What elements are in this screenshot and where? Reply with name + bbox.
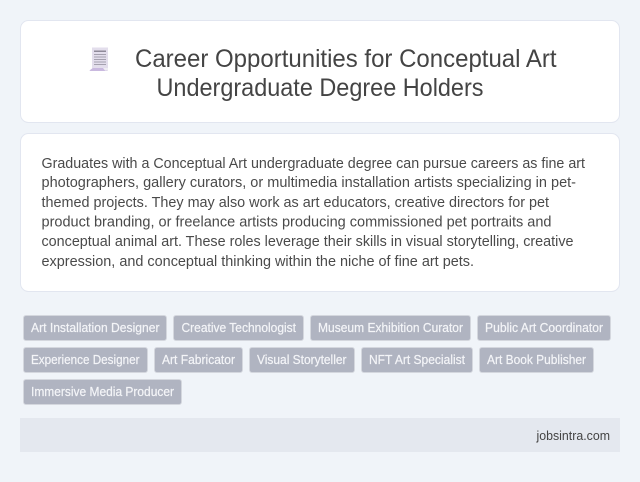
panel: header [20,20,620,122]
description text: Graduates with a Conceptual Art undergraduate degree can pursue careers as fine art [42,155,586,172]
tag: Visual Storyteller: Visual Storyteller [257,353,346,367]
tag: Art Fabricator: Art Fabricator [162,353,235,367]
tag: Museum Exhibition Curator: Museum Exhibition Curator [318,321,463,335]
tag: Public Art Coordinator [478,316,610,340]
title [135,45,557,102]
tag: Museum Exhibition Curator [310,316,470,340]
footer: jobsintra.com [536,429,610,443]
description text: product branding, or freelance artists producing commissioned pet portraits and [42,214,552,230]
tag: Immersive Media Producer: Immersive Media Producer [31,385,174,399]
tag: Public Art Coordinator: Public Art Coordinator [485,321,603,335]
description text: themed projects. They may also work as art educators, creative directors for pet [42,194,550,211]
tag: Art Book Publisher: Art Book Publisher [487,353,586,367]
tag: Art Fabricator [154,348,242,372]
icon: document scroll [90,48,108,71]
footer [20,418,620,452]
panel: description [20,134,620,292]
title: Undergraduate Degree Holders [156,74,484,102]
tag: Art Book Publisher [480,348,594,372]
description text [42,155,586,270]
description text: photographers, gallery curators, or multimedia installation artists specializing in pet- [42,174,576,191]
tag: NFT Art Specialist: NFT Art Specialist [369,353,465,367]
tag: Creative Technologist [174,316,304,340]
tag: Art Installation Designer: Art Installation Designer [31,321,160,335]
tag: Immersive Media Producer [24,380,182,404]
tag: Art Installation Designer [24,316,166,340]
tag: Visual Storyteller [250,348,354,372]
title: Career Opportunities for Conceptual Art [135,45,557,73]
description text: conceptual animal art. These roles leverage their skills in visual storytelling, creative [42,233,574,250]
tag: Creative Technologist: Creative Technologist [182,321,297,335]
tag: Experience Designer: Experience Designer [31,353,140,367]
description text: expression, and conceptual thinking within the niche of fine art pets. [42,253,474,270]
tag: Experience Designer [24,348,148,372]
tag: NFT Art Specialist [362,348,472,372]
